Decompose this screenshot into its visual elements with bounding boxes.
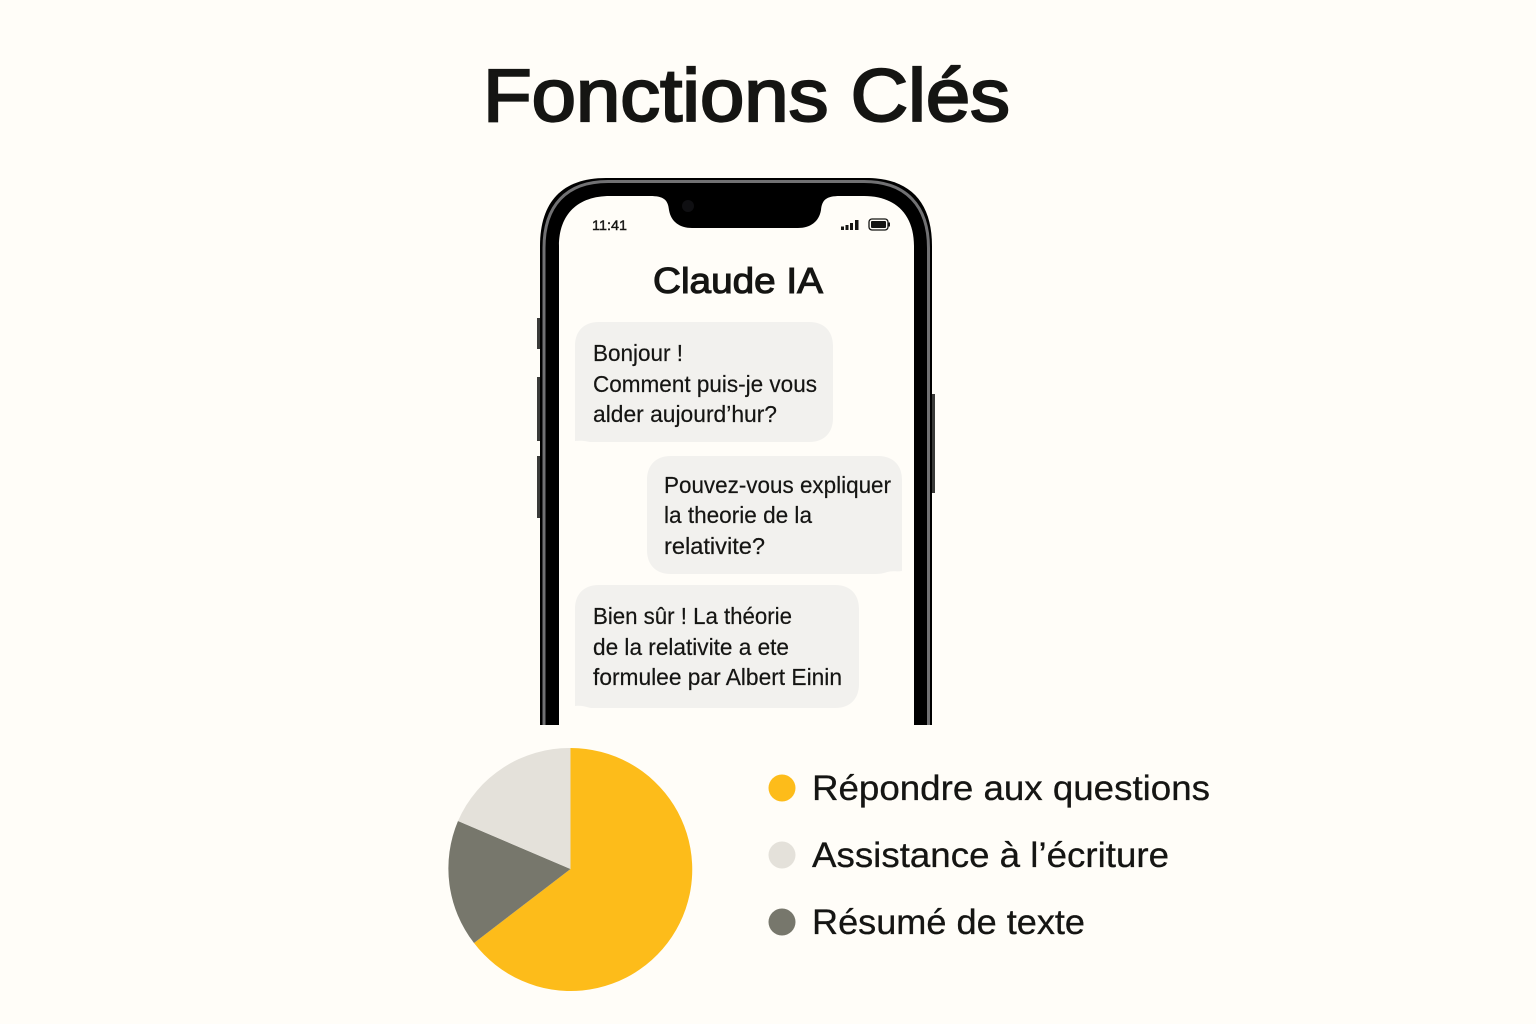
chat bubble: assistant answer: Bien sûr ! La théorie <box>593 603 792 629</box>
chat bubble: assistant greeting <box>575 322 833 442</box>
phone body <box>540 178 932 725</box>
chat bubble: user question: relativite? <box>664 533 765 559</box>
status bar: time: 11:41 <box>592 217 627 233</box>
legend <box>768 769 1210 942</box>
legend item: Assistance à l'écriture: Assistance à l’écriture <box>812 836 1169 875</box>
phone bezel highlight <box>544 182 928 725</box>
legend item: Répondre aux questions: Répondre aux questions <box>812 769 1210 808</box>
chat bubble: assistant answer <box>575 585 859 708</box>
chat bubble: assistant answer: formulee par Albert Einin <box>593 664 842 690</box>
icon: battery <box>869 219 890 230</box>
title: Fonctions Clés <box>483 54 1010 137</box>
chat bubble: assistant answer: de la relativite a ete <box>593 634 789 660</box>
chat bubble: user question: la theorie de la <box>664 502 813 528</box>
icon: notch camera <box>682 200 694 212</box>
phone screen <box>559 196 914 725</box>
chat bubble: assistant greeting: Bonjour ! <box>593 340 683 366</box>
slice: Résumé de texte <box>448 821 570 943</box>
chat bubble: user question: Pouvez-vous expliquer <box>664 472 891 498</box>
slice: Répondre aux questions <box>474 748 692 991</box>
icon: signal <box>841 220 858 230</box>
phone <box>537 178 935 725</box>
pie chart <box>448 748 692 991</box>
chat bubble: assistant greeting: Comment puis-je vous <box>593 371 817 397</box>
slice: Assistance à l'écriture <box>458 748 570 869</box>
phone side buttons <box>537 318 935 518</box>
chat bubble: user question <box>647 456 902 574</box>
legend item: Résumé de texte: Résumé de texte <box>812 903 1085 942</box>
phone heading: Claude IA <box>653 260 823 301</box>
chat bubble: assistant greeting: alder aujourd’hur? <box>593 401 777 427</box>
